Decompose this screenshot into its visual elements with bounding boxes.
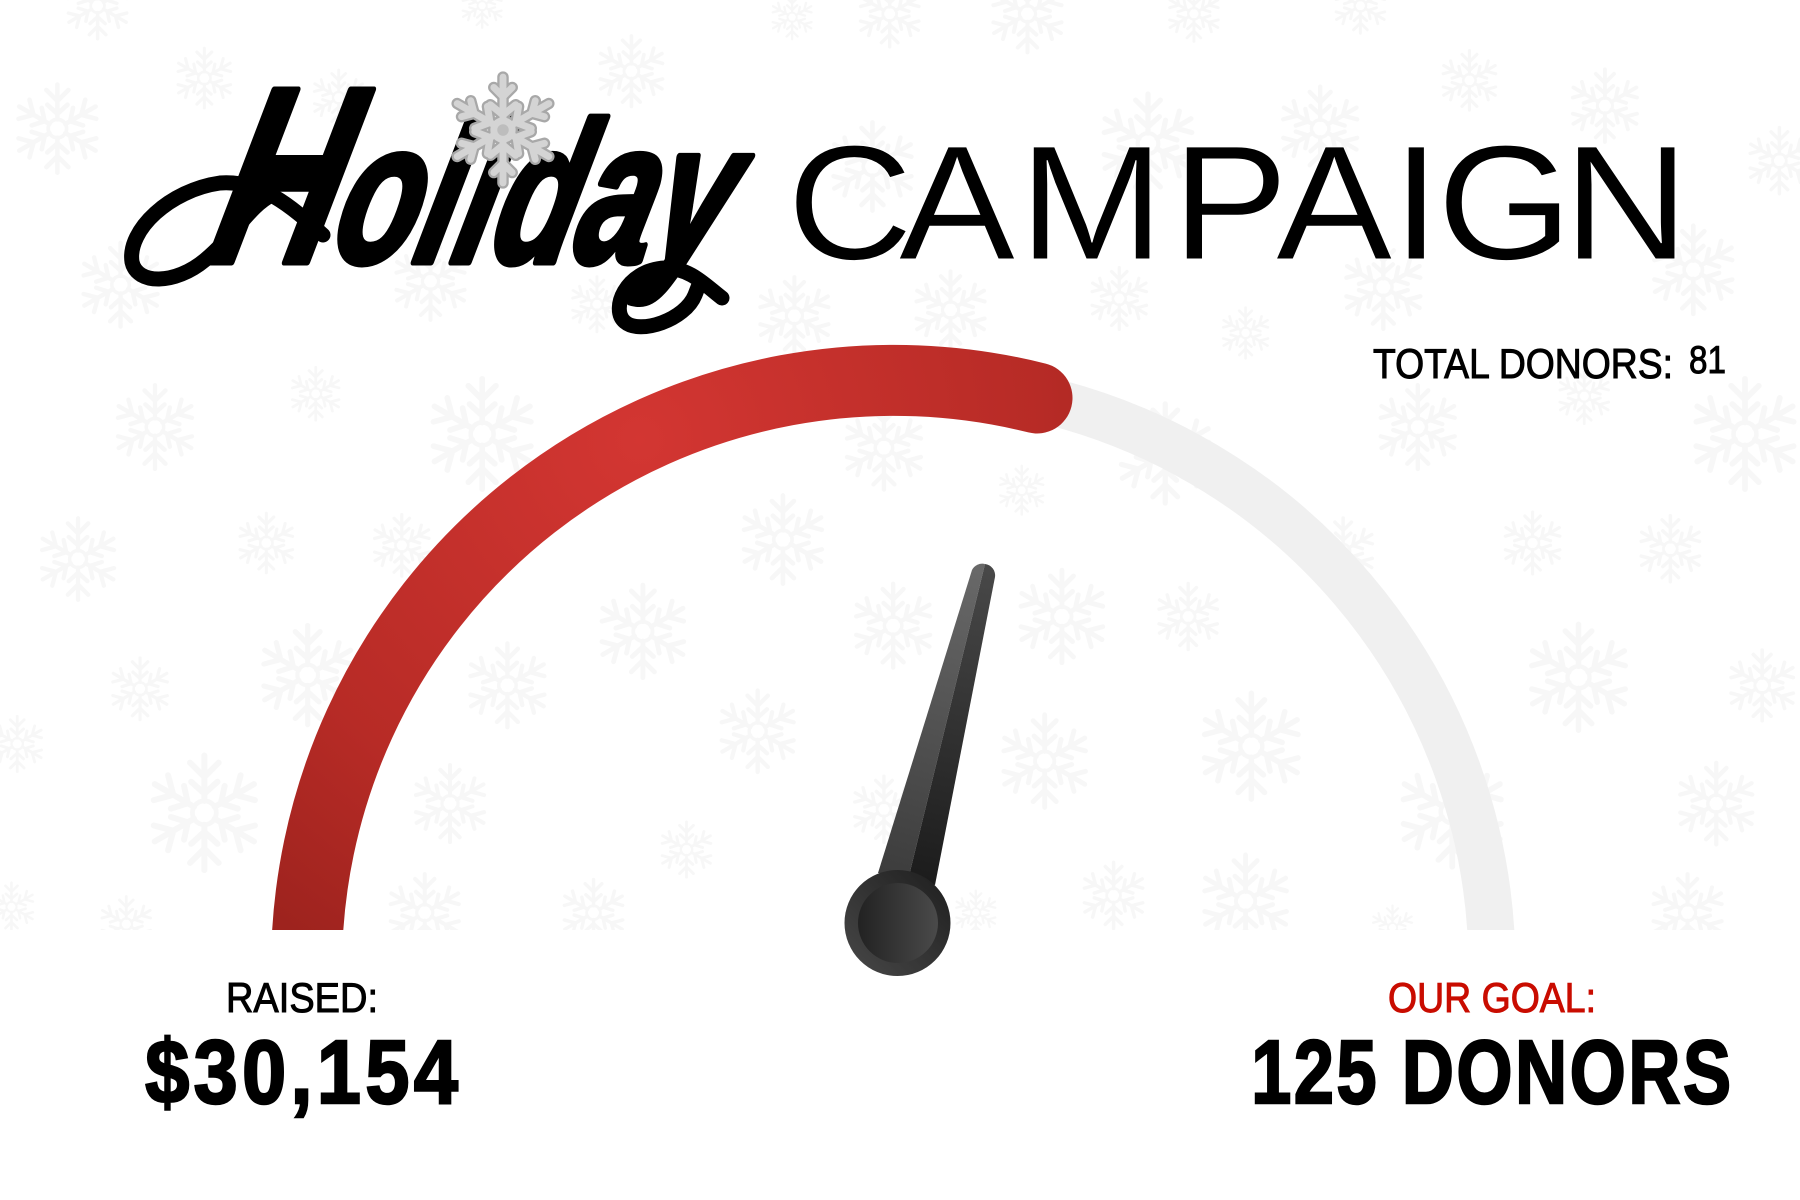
- gauge needle: [844, 564, 995, 976]
- raised value: $30,154: [145, 1021, 462, 1122]
- icon: silver glitter snowflake: [451, 77, 555, 183]
- raised label: RAISED:: [226, 974, 378, 1021]
- raised amount: [145, 974, 462, 1122]
- total donors counter: 81: [1689, 339, 1726, 382]
- title: [132, 36, 1689, 327]
- title word: CAMPAIGN: CAMPAIGN: [787, 111, 1689, 294]
- title script word: Holiday: Holiday: [192, 36, 783, 316]
- gauge progress arc: [306, 380, 1037, 968]
- background snowflake pattern: [0, 0, 1800, 952]
- gauge: [306, 380, 1492, 976]
- goal: [1251, 974, 1734, 1123]
- goal value: 125 DONORS: [1251, 1022, 1734, 1123]
- goal label: OUR GOAL:: [1388, 974, 1596, 1021]
- gauge track: [1057, 382, 1514, 930]
- total donors counter: TOTAL DONORS:: [1373, 340, 1673, 387]
